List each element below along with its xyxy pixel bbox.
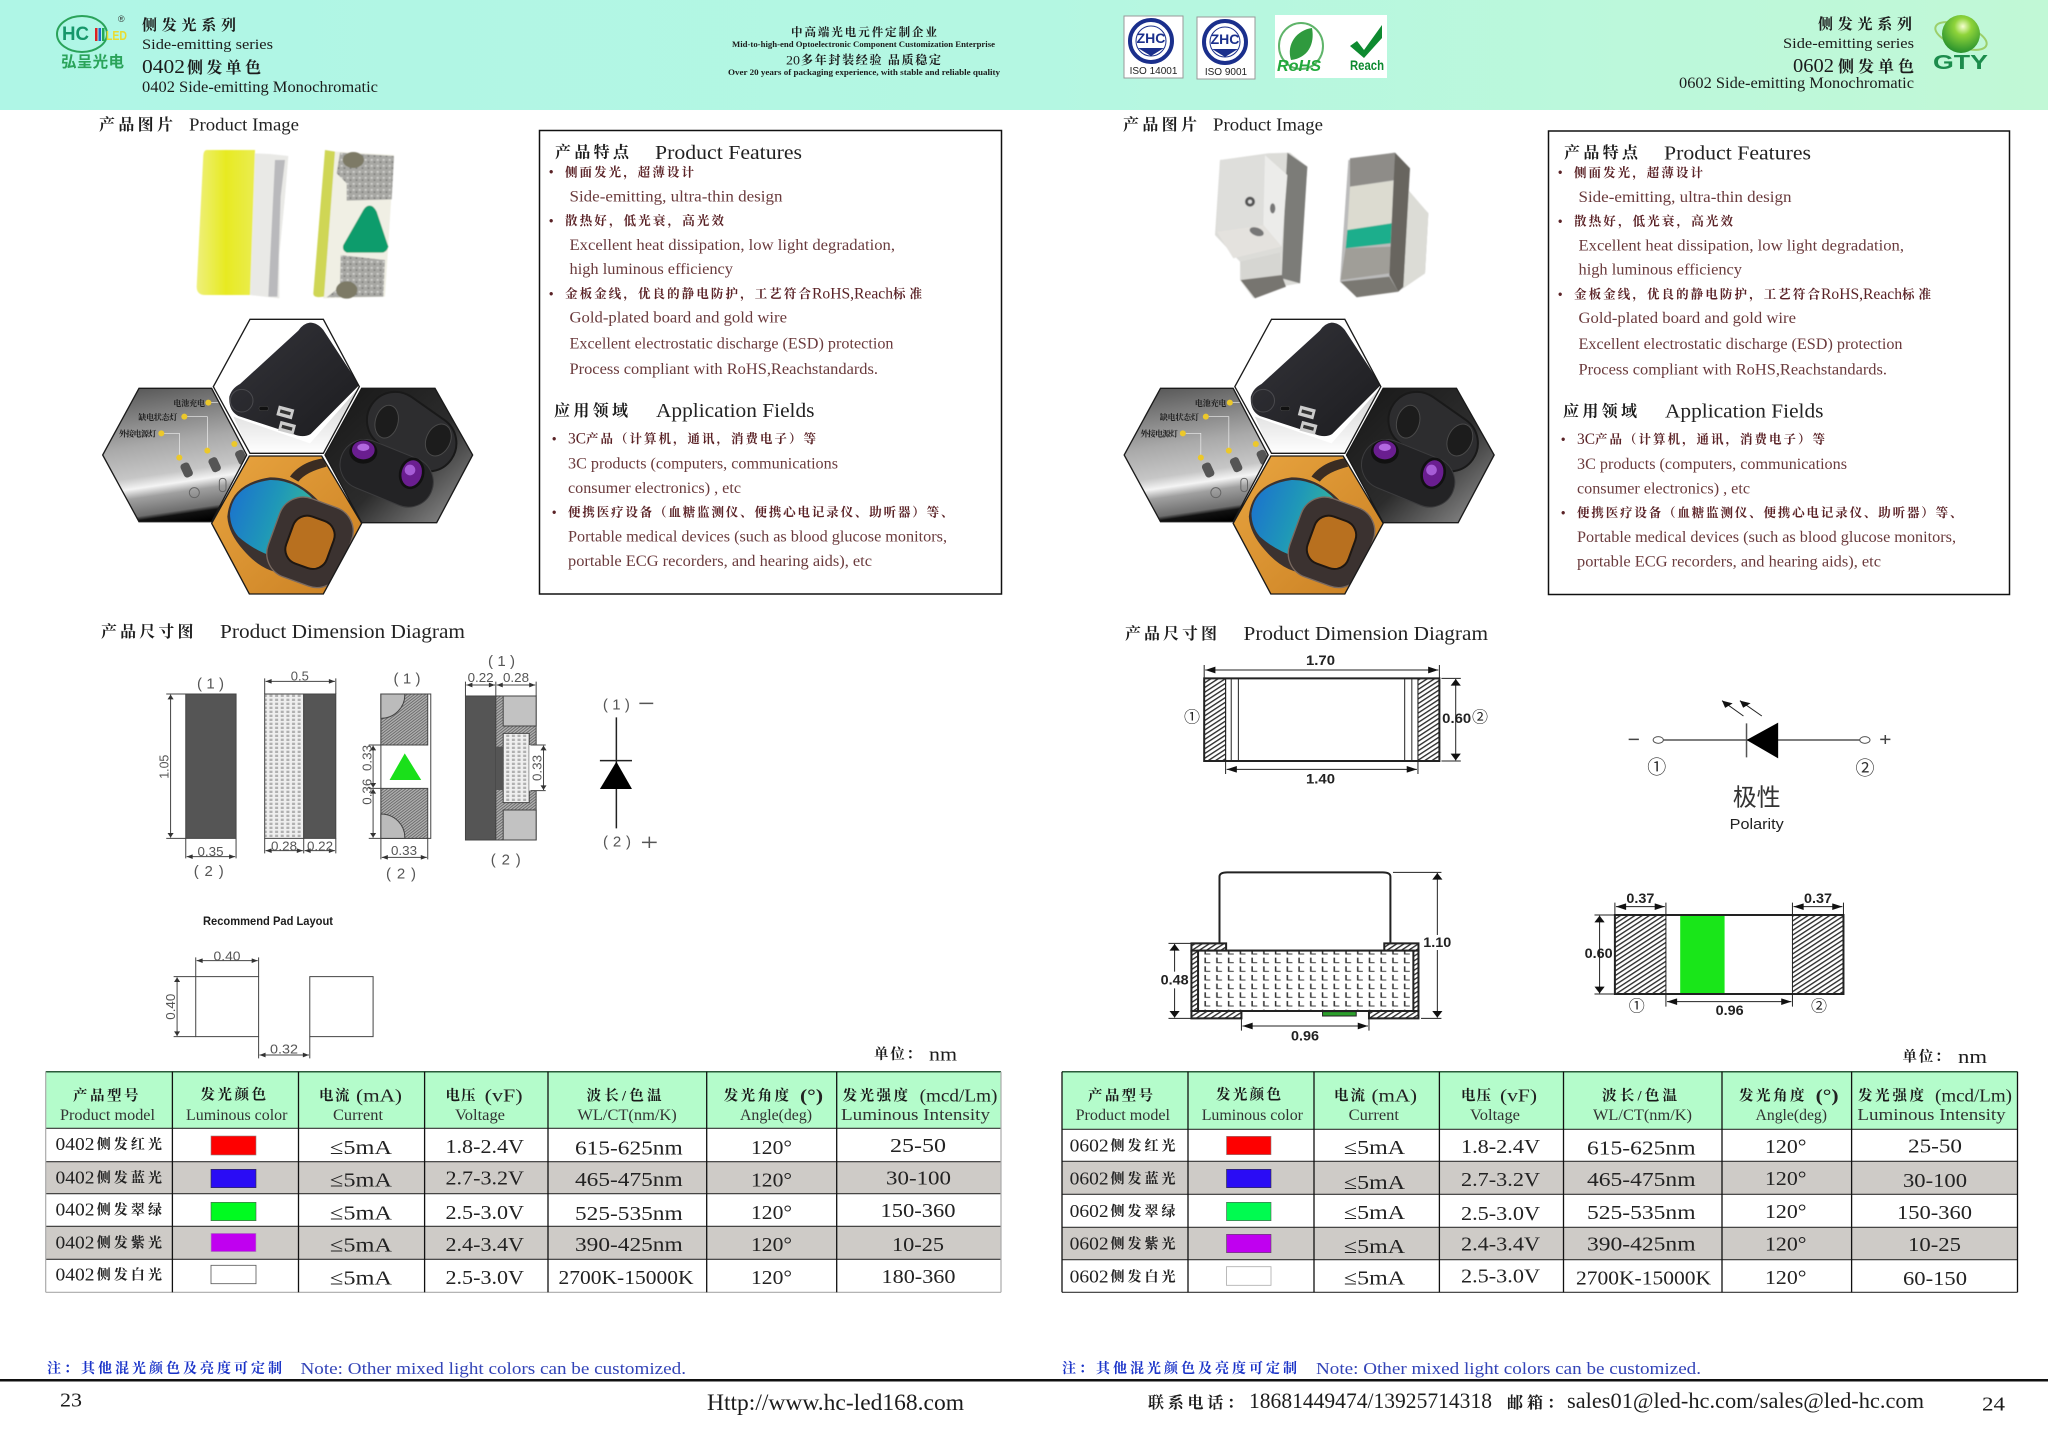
table: 0402 specifications: 2.4-3.4V <box>446 1234 525 1256</box>
table: 0602 specifications: (vF) <box>1500 1086 1537 1106</box>
table: 0402 specifications: 2.5-3.0V <box>446 1202 525 1224</box>
note: custom colours right <box>1062 1359 1701 1378</box>
chart: 0602 dimension drawing: 1.10 <box>1423 935 1451 950</box>
hexagon: power bank <box>1250 322 1380 444</box>
hexagon: indicator panel: 外接电源灯 <box>119 429 156 439</box>
heading: right series title <box>1679 15 1914 92</box>
icon: ISO 14001 certificate: ZHC <box>1137 30 1165 46</box>
chart: 0402 dimension drawing: 0.5 <box>291 668 309 684</box>
chart: 0402 dimension drawing: 1.05 <box>156 755 172 779</box>
table: 0602 specifications: Voltage <box>1470 1107 1520 1124</box>
panel: features and applications right <box>1548 131 2010 594</box>
panel: header band <box>0 0 2048 110</box>
panel: features and applications right: • <box>1561 506 1565 520</box>
panel: features and applications left: 散热好，低光衰，高光效 <box>565 213 724 228</box>
panel: features and applications left: 侧面发光，超薄设计 <box>565 164 694 180</box>
panel: features and applications right: Excellent heat dissipation, low light degradation, <box>1578 238 1904 254</box>
footer: contact details: 邮箱： <box>1507 1393 1563 1412</box>
panel: features and applications right: Excellent electrostatic discharge (ESD) protection <box>1578 336 1902 353</box>
label: unit right: 单位： <box>1902 1048 1950 1066</box>
icon: RoHS and Reach marks: Reach <box>1350 57 1384 73</box>
text block: company slogan: 20 <box>786 52 800 68</box>
panel: features and applications right: Application Fields <box>1665 400 1824 422</box>
table: 0602 specifications: (°) <box>1816 1086 1839 1106</box>
table: 0402 specifications: ≤5mA <box>330 1234 393 1256</box>
panel: features and applications right: 散热好，低光衰，高光效 <box>1574 214 1733 228</box>
chart: 0402 dimension drawing: 0.33 <box>391 843 417 858</box>
table: 0602 specifications: 发光强度 <box>1858 1086 1924 1104</box>
table: 0602 specifications: 侧发紫光 <box>1110 1236 1176 1253</box>
table: 0602 specifications: 525-535nm <box>1587 1202 1696 1224</box>
panel: features and applications right: Product Features <box>1664 142 1811 164</box>
chart: 0402 dimension drawing: (1) <box>488 653 515 670</box>
table: 0402 specifications: 产品型号 <box>73 1086 139 1104</box>
footer: page number 23: 23 <box>60 1390 82 1412</box>
image: 0402 chips <box>197 150 394 299</box>
hexagon: speaker <box>210 455 363 595</box>
chart: 0602 dimension drawing: ② <box>1855 758 1875 780</box>
icon: ISO 14001 certificate: ISO 14001 <box>1130 66 1178 77</box>
chart: 0402 dimension drawing: 0.28 <box>271 838 297 854</box>
logo: HC LED 弘呈光电: HC <box>62 24 89 45</box>
panel: features and applications left: Excellent heat dissipation, low light degradation, <box>570 237 895 254</box>
table: 0402 specifications: 120° <box>751 1137 792 1159</box>
table: 0402 specifications: 1.8-2.4V <box>446 1136 525 1158</box>
chart: 0402 dimension drawing: Recommend Pad Layout <box>203 916 333 928</box>
panel: features and applications right: 产品（计算机，通讯，消费电子）等 <box>1595 432 1825 446</box>
table: 0602 specifications: ≤5mA <box>1344 1172 1406 1194</box>
chart: 0602 dimension drawing: ① <box>1184 708 1200 726</box>
chart: 0402 dimension drawing: 0.33 <box>530 755 544 781</box>
chart: 0402 dimension drawing: (2) <box>194 863 224 880</box>
table: 0602 specifications: 0602 <box>1070 1169 1109 1189</box>
panel: features and applications right: 应用领域 <box>1563 402 1637 420</box>
panel: features and applications right: • <box>1558 214 1562 228</box>
panel: features and applications left: 应用领域 <box>554 401 628 420</box>
table: 0602 specifications: 120° <box>1765 1234 1806 1256</box>
table: 0602 specifications <box>1062 1072 2018 1292</box>
panel: features and applications right: 便携医疗设备（血糖监测仪、便携心电记录仪、助听器）等、 <box>1577 505 1962 520</box>
table: 0602 specifications: 0602 <box>1070 1234 1109 1254</box>
chart: 0402 dimension drawing: 0.28 <box>503 670 529 685</box>
chart: 0602 dimension drawing: 0.96 <box>1291 1028 1320 1044</box>
heading: product image right: Product Image <box>1213 114 1323 134</box>
logo: HC LED 弘呈光电 <box>57 14 127 71</box>
table: 0402 specifications: (vF) <box>485 1086 523 1106</box>
panel: features and applications left: 金板金线，优良的静电防护，工艺符合 <box>565 286 811 301</box>
panel: features and applications left: Application Fields <box>656 400 815 422</box>
label: unit left: 单位： <box>874 1045 921 1063</box>
chart: 0602 dimension drawing: ② <box>1472 708 1488 726</box>
table: 0602 specifications: ≤5mA <box>1344 1202 1406 1224</box>
table: 0402 specifications: (mA) <box>356 1086 402 1106</box>
table: 0602 specifications: 2.5-3.0V <box>1461 1203 1541 1225</box>
heading: left series title: 0402 <box>142 56 185 78</box>
heading: product image left: 产品图片 <box>99 115 173 134</box>
heading: left series title: 侧发单色 <box>187 58 261 77</box>
table: 0402 specifications: 0402 <box>56 1134 94 1154</box>
chart: 0602 dimension drawing: ② <box>1811 998 1827 1016</box>
heading: dimension diagram right: 产品尺寸图 <box>1125 624 1217 643</box>
table: 0402 specifications: 侧发紫光 <box>97 1234 162 1251</box>
table: 0602 specifications: Current <box>1349 1107 1400 1124</box>
table: 0402 specifications: 0402 <box>56 1232 94 1252</box>
heading: right series title: 侧发光系列 <box>1818 15 1912 33</box>
panel: features and applications left: high luminous efficiency <box>570 261 733 278</box>
table: 0602 specifications: 0602 <box>1070 1201 1109 1221</box>
label: unit left: nm <box>929 1045 957 1066</box>
chart: 0402 dimension drawing: 0.36 <box>360 779 374 805</box>
icon: ISO 9001 certificate: ISO 9001 <box>1205 67 1248 78</box>
table: 0602 specifications: (mA) <box>1372 1086 1417 1106</box>
table: 0402 specifications: 0402 <box>56 1265 94 1285</box>
panel: features and applications right: Portable medical devices (such as blood glucose monitors, <box>1577 529 1956 546</box>
panel: features and applications left: portable ECG recorders, and hearing aids), etc <box>568 553 872 570</box>
table: 0402 specifications: 侧发蓝光 <box>97 1169 162 1186</box>
logo: GTY globe <box>1932 15 1990 74</box>
panel: features and applications left: RoHS,Reach <box>812 286 893 302</box>
table: 0602 specifications: ≤5mA <box>1344 1268 1406 1290</box>
table: 0602 specifications: ≤5mA <box>1344 1137 1406 1159</box>
table: 0602 specifications: ≤5mA <box>1344 1236 1406 1258</box>
chart: 0602 dimension drawing: 0.60 <box>1585 946 1613 961</box>
panel: features and applications left: Gold-plated board and gold wire <box>570 310 787 326</box>
hexagon: earbuds <box>1345 381 1495 523</box>
text block: company slogan <box>728 25 1001 77</box>
table: 0602 specifications: Luminous color <box>1202 1107 1304 1124</box>
table: 0402 specifications: Voltage <box>455 1107 505 1124</box>
table: 0602 specifications: 产品型号 <box>1088 1086 1154 1104</box>
panel: features and applications left: • <box>552 506 556 520</box>
hexagon: speaker <box>1231 455 1385 595</box>
hexagon: indicator panel: 外接电源灯 <box>1140 429 1178 439</box>
footer: page number 24: 24 <box>1982 1394 2005 1416</box>
heading: left series title: 0402 Side-emitting Monochromatic <box>142 79 378 96</box>
table: 0602 specifications: 发光角度 <box>1739 1086 1805 1104</box>
panel: features and applications right: 侧面发光，超薄设计 <box>1574 165 1703 180</box>
table: 0602 specifications: 0602 <box>1070 1135 1109 1155</box>
table: 0602 specifications: 2700K-15000K <box>1576 1268 1712 1290</box>
table: 0602 specifications: WL/CT(nm/K) <box>1593 1107 1692 1124</box>
chart: 0402 dimension drawing: 0.32 <box>270 1042 298 1056</box>
panel: features and applications right: RoHS,Reach <box>1821 286 1902 303</box>
table: 0402 specifications: 30-100 <box>886 1168 951 1190</box>
icon: ISO 14001 certificate <box>1124 16 1183 78</box>
chart: 0402 dimension drawing: (1) <box>603 696 630 714</box>
panel: features and applications right: 金板金线，优良的静电防护，工艺符合 <box>1574 286 1820 302</box>
logo: HC LED 弘呈光电: 弘呈光电 <box>61 53 124 71</box>
table: 0602 specifications: 615-625nm <box>1587 1138 1696 1160</box>
text block: company slogan: Mid-to-high-end Optoelectronic Component Customization Enterprise <box>732 39 995 49</box>
chart: 0402 dimension drawing: (2) <box>491 852 521 868</box>
table: 0602 specifications: (mcd/Lm) <box>1935 1086 2012 1106</box>
table: 0402 specifications: 发光强度 <box>843 1086 908 1104</box>
table: 0402 specifications: ≤5mA <box>330 1202 393 1224</box>
panel: features and applications right: Gold-plated board and gold wire <box>1578 310 1796 327</box>
chart: 0602 dimension drawing: 极性 <box>1733 784 1781 812</box>
table: 0402 specifications: ≤5mA <box>330 1137 393 1159</box>
table: 0602 specifications: 0602 <box>1070 1266 1109 1286</box>
chart: 0402 dimension drawing: 0.40 <box>163 994 178 1020</box>
table: 0402 specifications: 120° <box>751 1170 792 1192</box>
heading: left series title: Side-emitting series <box>142 37 273 53</box>
table: 0602 specifications: Product model <box>1076 1107 1171 1124</box>
heading: right series title: Side-emitting series <box>1783 36 1914 52</box>
panel: features and applications left: consumer electronics) , etc <box>568 480 741 497</box>
table: 0402 specifications: 0402 <box>56 1167 94 1187</box>
logo: HC LED 弘呈光电: LED <box>106 28 127 43</box>
chart: 0602 dimension drawing: 0.96 <box>1716 1003 1744 1018</box>
note: custom colours left: 注：其他混光颜色及亮度可定制 <box>47 1360 282 1377</box>
panel: features and applications right: high luminous efficiency <box>1578 262 1742 278</box>
chart: 0402 dimension drawing: 0.33 <box>360 745 374 771</box>
heading: dimension diagram right <box>1125 623 1488 645</box>
table: 0602 specifications: 发光颜色 <box>1216 1086 1282 1104</box>
table: 0402 specifications: 2.7-3.2V <box>446 1168 525 1190</box>
table: 0602 specifications: Luminous Intensity <box>1857 1105 2006 1124</box>
table: 0602 specifications: 150-360 <box>1897 1202 1972 1224</box>
heading: left series title: 侧发光系列 <box>142 16 236 34</box>
table: 0402 specifications: 390-425nm <box>575 1234 683 1256</box>
table: 0402 specifications: ≤5mA <box>330 1268 393 1290</box>
table: 0402 specifications: 0402 <box>56 1199 94 1219</box>
panel: features and applications right: consumer electronics) , etc <box>1577 480 1750 498</box>
table: 0602 specifications: 10-25 <box>1908 1234 1961 1256</box>
table: 0402 specifications: 180-360 <box>882 1266 956 1288</box>
chart: 0602 dimension drawing: ① <box>1629 998 1645 1016</box>
hexagon: earbuds <box>323 381 473 523</box>
heading: dimension diagram right: Product Dimension Diagram <box>1244 623 1488 645</box>
table: 0602 specifications: 2.5-3.0V <box>1461 1266 1541 1288</box>
table: 0402 specifications: Current <box>333 1107 384 1124</box>
chart: 0602 dimension drawing: 0.48 <box>1161 972 1189 988</box>
heading: product image right <box>1123 114 1323 134</box>
panel: features and applications right: 3C products (computers, communications <box>1577 456 1847 473</box>
heading: dimension diagram left <box>101 621 465 643</box>
chart: 0402 dimension drawing <box>156 653 657 1058</box>
chart: 0402 dimension drawing: 0.35 <box>198 844 224 859</box>
panel: features and applications right: portable ECG recorders, and hearing aids), etc <box>1577 554 1881 570</box>
icon: RoHS and Reach marks <box>1275 15 1387 78</box>
table: 0602 specifications: 465-475nm <box>1587 1169 1696 1191</box>
panel: features and applications right: Process compliant with RoHS,Reachstandards. <box>1578 362 1887 378</box>
table: 0602 specifications: 120° <box>1765 1201 1806 1223</box>
hexagon: indicator panel: 缺电状态灯 <box>138 412 177 422</box>
panel: features and applications left: Excellent electrostatic discharge (ESD) protection <box>570 336 894 352</box>
panel: features and applications left: • <box>552 432 556 446</box>
note: custom colours left: Note: Other mixed light colors can be customized. <box>300 1359 686 1378</box>
logo: HC LED 弘呈光电: ® <box>118 14 125 24</box>
table: 0602 specifications: 120° <box>1765 1136 1806 1158</box>
panel: features and applications left: Process compliant with RoHS,Reachstandards. <box>570 361 878 378</box>
table: 0602 specifications: 电流 <box>1334 1086 1366 1104</box>
chart: 0602 dimension drawing: 1.40 <box>1306 772 1335 786</box>
table: 0602 specifications: 60-150 <box>1903 1268 1967 1290</box>
table: 0402 specifications: Luminous color <box>186 1107 288 1124</box>
chart: 0402 dimension drawing: 0.22 <box>468 670 494 685</box>
table: 0402 specifications: 电流 <box>319 1086 350 1104</box>
text block: company slogan: 中高端光电元件定制企业 <box>791 25 938 39</box>
table: 0402 specifications: 侧发白光 <box>97 1267 162 1284</box>
table: 0402 specifications: Luminous Intensity <box>841 1105 991 1124</box>
table: 0402 specifications: 10-25 <box>892 1234 944 1256</box>
table: 0402 specifications: 侧发红光 <box>97 1136 162 1153</box>
hexagon: indicator panel: 电池充电 <box>1195 398 1226 408</box>
table: 0402 specifications: 发光颜色 <box>200 1086 266 1104</box>
table: 0602 specifications: 390-425nm <box>1587 1234 1696 1256</box>
table: 0602 specifications: 侧发白光 <box>1110 1268 1176 1285</box>
table: 0402 specifications: 25-50 <box>890 1135 946 1157</box>
hexagon: indicator panel: 电池充电 <box>173 398 205 408</box>
table: 0402 specifications: 电压 <box>446 1088 476 1104</box>
table: 0602 specifications: 120° <box>1765 1168 1806 1190</box>
panel: features and applications left <box>540 130 1002 594</box>
panel: features and applications left: 产品特点 <box>555 142 630 162</box>
heading: right series title: 0602 Side-emitting Monochromatic <box>1679 75 1914 92</box>
table: 0402 specifications: 120° <box>751 1234 792 1256</box>
chart: 0602 dimension drawing: 0.37 <box>1626 891 1654 906</box>
panel: features and applications left: Side-emitting, ultra-thin design <box>570 188 782 206</box>
hexagon: indicator panel: 缺电状态灯 <box>1160 412 1199 422</box>
table: 0402 specifications: 120° <box>751 1267 792 1289</box>
chart: 0602 dimension drawing: 0.37 <box>1804 891 1832 906</box>
chart: 0602 dimension drawing: Polarity <box>1730 817 1785 833</box>
table: 0402 specifications: 发光角度 <box>724 1086 790 1104</box>
table: 0402 specifications: 120° <box>751 1202 792 1224</box>
table: 0602 specifications: 2.4-3.4V <box>1461 1234 1541 1256</box>
table: 0402 specifications: 侧发翠绿 <box>97 1201 162 1218</box>
table: 0402 specifications: (°) <box>800 1086 823 1106</box>
table: 0402 specifications: Angle(deg) <box>740 1107 812 1124</box>
label: unit left <box>874 1045 957 1066</box>
table: 0602 specifications: 侧发红光 <box>1110 1137 1176 1154</box>
heading: product image right: 产品图片 <box>1123 115 1197 134</box>
text block: company slogan: Over 20 years of packaging experience, with stable and reliable quality <box>728 67 1001 77</box>
panel: features and applications right: • <box>1561 432 1565 446</box>
table: 0602 specifications: 30-100 <box>1903 1170 1967 1192</box>
table: 0602 specifications: 1.8-2.4V <box>1461 1136 1541 1158</box>
text block: company slogan: 多年封装经验 品质稳定 <box>801 52 941 67</box>
image: application hexagons left <box>100 318 473 595</box>
chart: 0602 dimension drawing: 0.60 <box>1442 711 1471 726</box>
hexagon: power bank <box>229 322 358 444</box>
panel: features and applications left: Portable medical devices (such as blood glucose monitors, <box>568 528 947 546</box>
panel: features and applications left: Product Features <box>655 142 802 164</box>
heading: dimension diagram left: Product Dimension Diagram <box>220 621 465 643</box>
table: 0402 specifications: 2.5-3.0V <box>446 1267 525 1289</box>
heading: product image left: Product Image <box>189 114 299 134</box>
image: 0602 chips <box>1215 153 1428 298</box>
chart: 0402 dimension drawing: (2) <box>603 834 631 850</box>
table: 0602 specifications: 侧发蓝光 <box>1110 1171 1176 1188</box>
panel: features and applications right: 3C <box>1577 431 1595 448</box>
table: 0402 specifications: 465-475nm <box>575 1169 683 1191</box>
chart: 0402 dimension drawing: (1) <box>197 676 224 692</box>
footer: contact details <box>1148 1388 1924 1413</box>
panel: features and applications left: 产品（计算机，通讯，消费电子）等 <box>586 431 816 446</box>
heading: product image left <box>99 114 299 134</box>
panel: features and applications left: 3C <box>568 430 586 448</box>
table: 0402 specifications: 525-535nm <box>575 1203 683 1225</box>
label: unit right <box>1902 1047 1987 1068</box>
footer: contact details: 联系电话： <box>1148 1393 1243 1412</box>
icon: ISO 9001 certificate <box>1197 17 1255 79</box>
panel: features and applications right: 标准 <box>1902 286 1931 302</box>
table: 0402 specifications: (mcd/Lm) <box>920 1086 997 1106</box>
chart: 0602 dimension drawing <box>1161 653 1890 1044</box>
table: 0602 specifications: 侧发翠绿 <box>1110 1203 1176 1220</box>
table: 0602 specifications: 2.7-3.2V <box>1461 1169 1541 1191</box>
panel: features and applications left: 便携医疗设备（血糖监测仪、便携心电记录仪、助听器）等、 <box>568 504 954 520</box>
table: 0402 specifications: WL/CT(nm/K) <box>577 1107 677 1124</box>
hexagon: indicator panel <box>100 387 249 523</box>
chart: 0402 dimension drawing: (1) <box>394 670 420 688</box>
table: 0602 specifications: 波长/色温 <box>1602 1086 1678 1104</box>
icon: RoHS and Reach marks: RoHS <box>1277 58 1321 75</box>
panel: features and applications left: • <box>549 165 553 179</box>
chart: 0602 dimension drawing: ① <box>1647 756 1666 778</box>
table: 0402 specifications: 615-625nm <box>575 1138 683 1160</box>
heading: left series title <box>142 16 378 96</box>
table: 0402 specifications: 2700K-15000K <box>558 1267 694 1289</box>
logo: GTY globe: GTY <box>1933 52 1989 74</box>
panel: features and applications right: Side-emitting, ultra-thin design <box>1578 189 1792 206</box>
chart: 0402 dimension drawing: (2) <box>386 866 416 882</box>
panel: features and applications right: 产品特点 <box>1564 143 1639 162</box>
heading: right series title: 0602 <box>1793 55 1834 77</box>
label: unit right: nm <box>1958 1047 1987 1068</box>
panel: features and applications right: • <box>1558 166 1562 180</box>
table: 0602 specifications: 电压 <box>1461 1088 1492 1104</box>
table: 0402 specifications: 波长/色温 <box>586 1086 662 1104</box>
panel: features and applications left: 3C products (computers, communications <box>568 456 838 472</box>
table: 0402 specifications <box>46 1072 1001 1292</box>
table: 0602 specifications: 120° <box>1765 1267 1806 1289</box>
footer: contact details: 18681449474/13925714318 <box>1249 1388 1492 1413</box>
table: 0402 specifications: Product model <box>60 1107 156 1124</box>
table: 0402 specifications: ≤5mA <box>330 1170 393 1192</box>
footer: website: Http://www.hc-led168.com <box>707 1390 964 1415</box>
panel: features and applications left: • <box>549 214 553 228</box>
note: custom colours right: 注：其他混光颜色及亮度可定制 <box>1062 1360 1297 1377</box>
chart: 0602 dimension drawing: 1.70 <box>1306 653 1335 668</box>
image: application hexagons right <box>1121 318 1495 595</box>
note: custom colours right: Note: Other mixed light colors can be customized. <box>1316 1359 1701 1378</box>
hexagon: indicator panel <box>1121 387 1270 523</box>
note: custom colours left <box>47 1359 686 1378</box>
panel: features and applications left: 标准 <box>893 286 922 301</box>
table: 0602 specifications: 25-50 <box>1908 1136 1962 1158</box>
heading: dimension diagram left: 产品尺寸图 <box>101 622 194 641</box>
icon: ISO 9001 certificate: ZHC <box>1211 31 1239 47</box>
chart: 0402 dimension drawing: 0.22 <box>307 838 333 854</box>
chart: 0402 dimension drawing: 0.40 <box>214 948 240 964</box>
table: 0402 specifications: 150-360 <box>880 1200 956 1222</box>
panel: features and applications left: • <box>549 287 553 301</box>
heading: right series title: 侧发单色 <box>1838 57 1914 76</box>
panel: features and applications right: • <box>1558 288 1562 302</box>
table: 0602 specifications: Angle(deg) <box>1756 1107 1827 1124</box>
footer: contact details: sales01@led-hc.com/sales@led-hc.com <box>1567 1388 1924 1413</box>
